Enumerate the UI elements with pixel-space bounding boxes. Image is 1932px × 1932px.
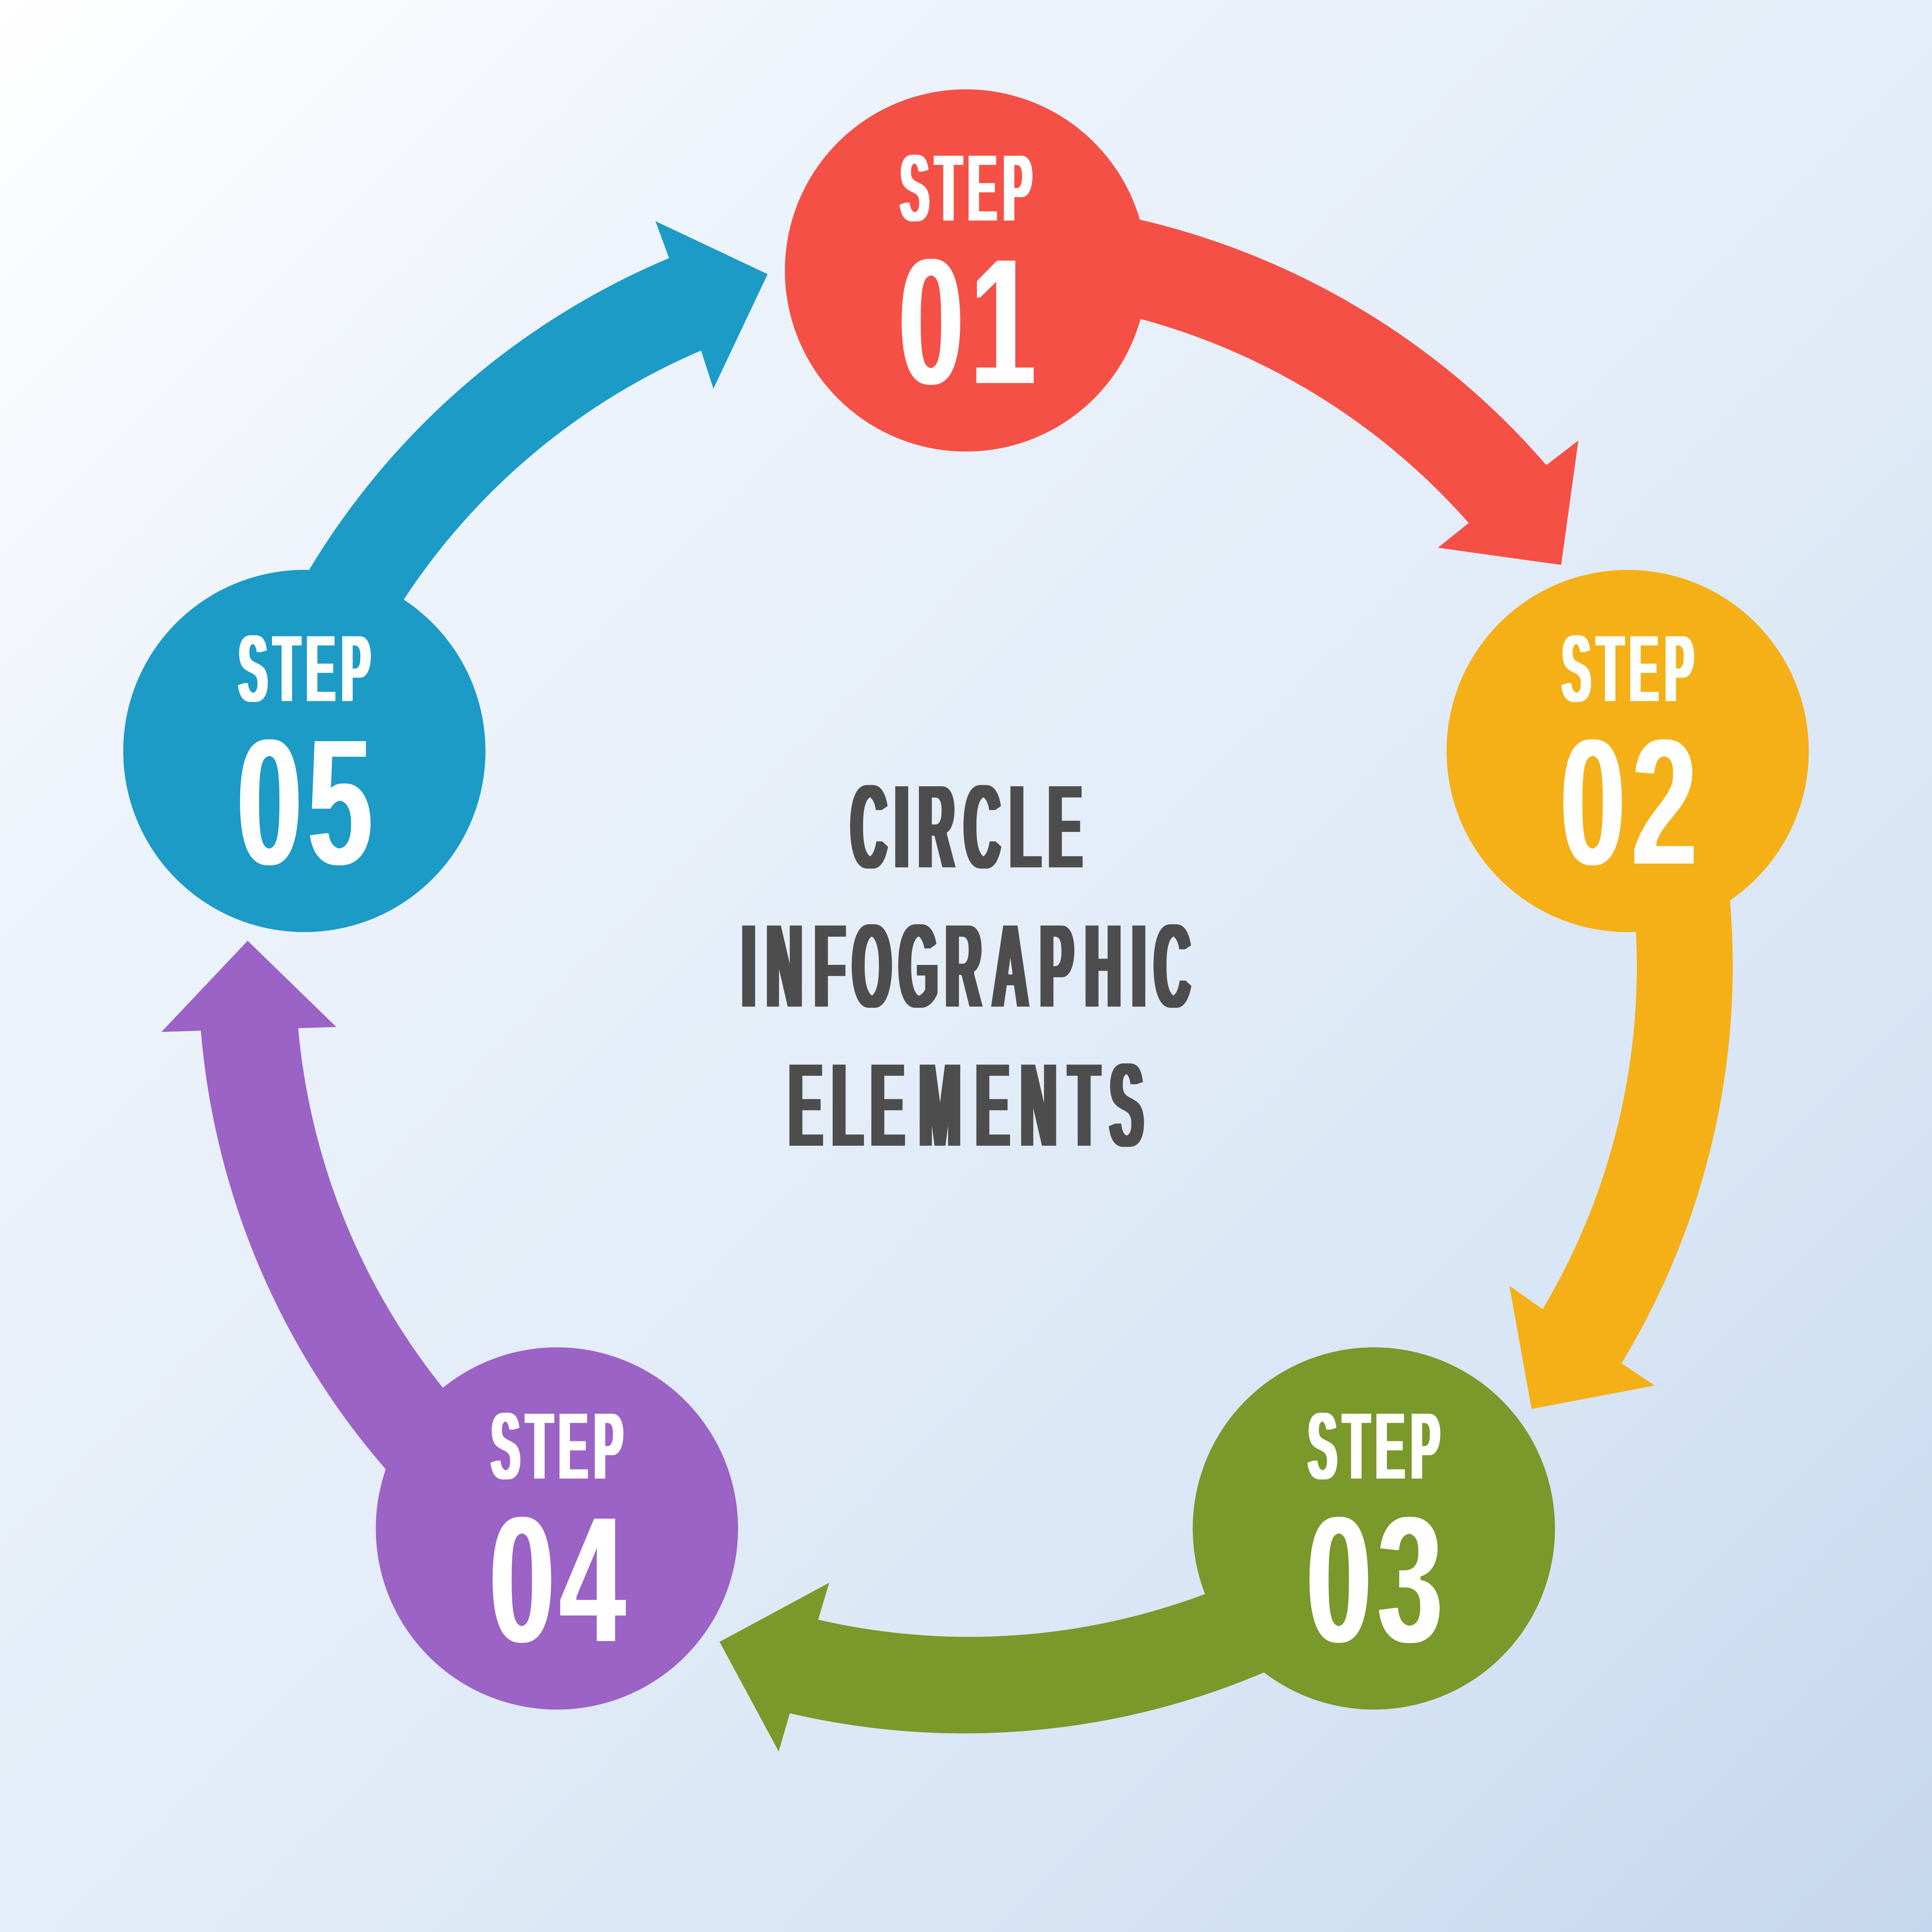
- title line 2: INFOGRAPHIC: [742, 898, 1190, 1034]
- label: step 3: STEP: [1308, 1392, 1440, 1500]
- circle: step 5: [123, 570, 485, 932]
- number: 04: 04: [490, 1477, 626, 1681]
- circle: step 4: [376, 1347, 738, 1709]
- number: 02: 02: [1560, 700, 1697, 904]
- step 4 badge: [376, 1347, 738, 1709]
- title: [742, 759, 1190, 1173]
- label: step 4: STEP: [491, 1392, 623, 1500]
- number: 05: 05: [237, 700, 372, 904]
- number: 01: 01: [899, 219, 1036, 423]
- title line 1: CIRCLE: [851, 759, 1082, 895]
- arrow: step 1 to step 2: [1109, 213, 1578, 565]
- arrow: step 3 to step 4: [719, 1578, 1294, 1752]
- arrow: step 5 to step 1: [289, 221, 768, 635]
- step 2 badge: [1447, 570, 1809, 932]
- circle: step 1: [785, 89, 1147, 452]
- step 3 badge: [1193, 1347, 1555, 1709]
- arrow: step 2 to step 3: [1509, 864, 1733, 1409]
- title line 3: ELEMENTS: [789, 1037, 1143, 1173]
- number: 03: 03: [1306, 1477, 1442, 1681]
- circle: step 3: [1193, 1347, 1555, 1709]
- circle: step 2: [1447, 570, 1809, 932]
- step 5 badge: [123, 570, 485, 932]
- label: step 2: STEP: [1562, 614, 1694, 722]
- label: step 1: STEP: [900, 134, 1032, 242]
- step 1 badge: [785, 89, 1147, 452]
- label: step 5: STEP: [238, 614, 370, 722]
- arrow: step 4 to step 5: [162, 941, 468, 1499]
